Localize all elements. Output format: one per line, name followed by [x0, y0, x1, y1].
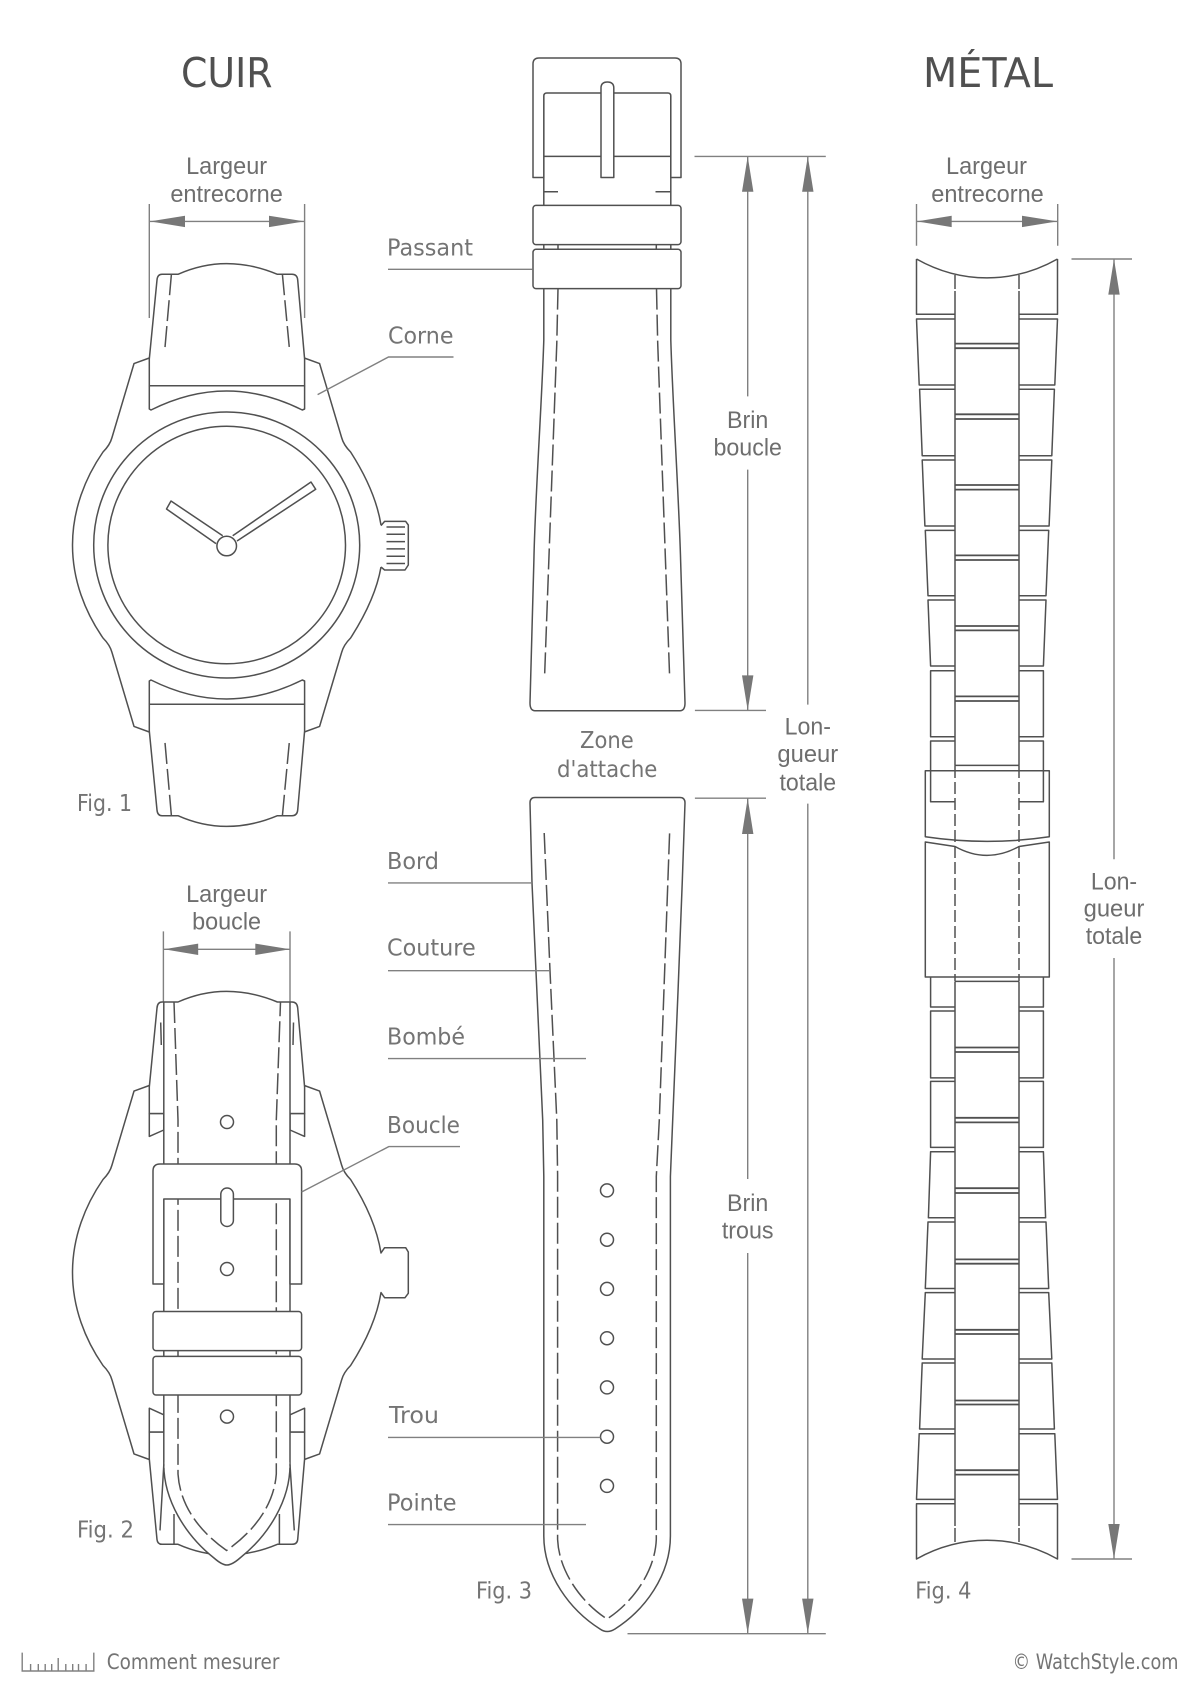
- dimension: largeur entrecorne: Largeur: [186, 153, 267, 180]
- title: CUIR: CUIR: [181, 49, 272, 97]
- dimension: largeur entrecorne: entrecorne: [170, 181, 283, 208]
- watch hands: [166, 482, 316, 556]
- dimension: largeur entrecorne: Largeur: [946, 153, 1027, 180]
- pointed strap tip: [164, 1465, 290, 1565]
- dimension: largeur boucle: [163, 881, 290, 1002]
- dimension: longueur totale cuir: gueur: [777, 741, 838, 768]
- buckle strap piece: [530, 289, 685, 711]
- dimension: brin boucle: boucle: [713, 434, 782, 461]
- buckle pin: [221, 1188, 233, 1226]
- buckle pin: [601, 82, 614, 178]
- label: Corne: [318, 322, 454, 395]
- bezel: [94, 412, 360, 678]
- holes: [220, 1116, 234, 1423]
- dimension: brin trous: Brin: [727, 1190, 768, 1217]
- strap band: [160, 1002, 294, 1565]
- label: Passant: Passant: [387, 233, 473, 261]
- clasp: [925, 766, 1049, 981]
- dimension: brin trous: trous: [722, 1218, 774, 1245]
- label: Bombé: Bombé: [387, 1023, 465, 1051]
- dimension: longueur totale cuir: [777, 156, 838, 1634]
- label: Fig. 3: Fig. 3: [476, 1577, 532, 1605]
- label: Trou: Trou: [388, 1401, 439, 1429]
- dimension: largeur entrecorne: [916, 153, 1058, 246]
- dimension: brin boucle: [694, 156, 826, 710]
- dimension: longueur totale metal: gueur: [1084, 895, 1144, 922]
- icon: ruler: [22, 1653, 94, 1671]
- left links: [916, 259, 987, 1559]
- upper strap: [149, 991, 305, 1136]
- dimension: longueur totale cuir: totale: [780, 769, 836, 796]
- watch case right side: [304, 358, 381, 732]
- label: Boucle: Boucle: [387, 1111, 460, 1139]
- lower strap: [149, 680, 305, 826]
- title: MÉTAL: MÉTAL: [923, 49, 1053, 97]
- dimension: brin trous: [628, 798, 826, 1634]
- dimension: brin boucle: Brin: [727, 407, 768, 434]
- label: Bord: Bord: [387, 847, 439, 875]
- label: Zone d'attache: Zone: [580, 726, 634, 754]
- footer: comment mesurer: [22, 1650, 280, 1674]
- label: Fig. 1: Fig. 1: [77, 789, 132, 817]
- label: Corne: Corne: [388, 322, 454, 350]
- label: Zone d'attache: d'attache: [557, 755, 657, 783]
- keepers: [533, 205, 681, 289]
- label: Zone d'attache: [557, 726, 657, 783]
- upper strap: [149, 264, 305, 410]
- strap keepers: [153, 1312, 302, 1395]
- panel: Fig. 2 watch back: [72, 881, 460, 1565]
- dimension: largeur boucle: boucle: [192, 909, 261, 936]
- center links: [955, 275, 1019, 1543]
- dimension: largeur boucle: Largeur: [186, 881, 267, 908]
- dimension: longueur totale cuir: Lon-: [785, 713, 831, 740]
- strap holes: [600, 1184, 614, 1492]
- dimension: longueur totale metal: totale: [1086, 923, 1142, 950]
- panel: Fig. 3 leather strap: [387, 58, 838, 1634]
- text: comment mesurer: Comment mesurer: [107, 1650, 280, 1674]
- label: Fig. 2: Fig. 2: [77, 1516, 134, 1544]
- dimension: longueur totale metal: Lon-: [1091, 868, 1137, 895]
- label: Couture: Couture: [387, 934, 476, 962]
- label: Pointe: Pointe: [387, 1488, 456, 1516]
- watch case back: [72, 1086, 408, 1460]
- right links: [987, 259, 1058, 1559]
- dimension: largeur entrecorne: entrecorne: [931, 181, 1044, 208]
- dial: [108, 426, 346, 664]
- watch case: [72, 358, 149, 732]
- icon: crown: [381, 521, 408, 570]
- buckle: [533, 58, 681, 178]
- dimension: largeur entrecorne: [149, 153, 305, 318]
- panel: Fig. 1 watch front: [72, 153, 454, 826]
- lower strap end: [149, 1408, 305, 1555]
- panel: Fig. 4 metal bracelet: [915, 153, 1144, 1605]
- holed strap piece: [530, 798, 685, 1632]
- label: Fig. 4: Fig. 4: [915, 1577, 972, 1605]
- buckle: [153, 1164, 302, 1284]
- buckle strip: [544, 93, 671, 250]
- label: Boucle: [302, 1111, 460, 1192]
- dimension: longueur totale metal: [1072, 259, 1144, 1559]
